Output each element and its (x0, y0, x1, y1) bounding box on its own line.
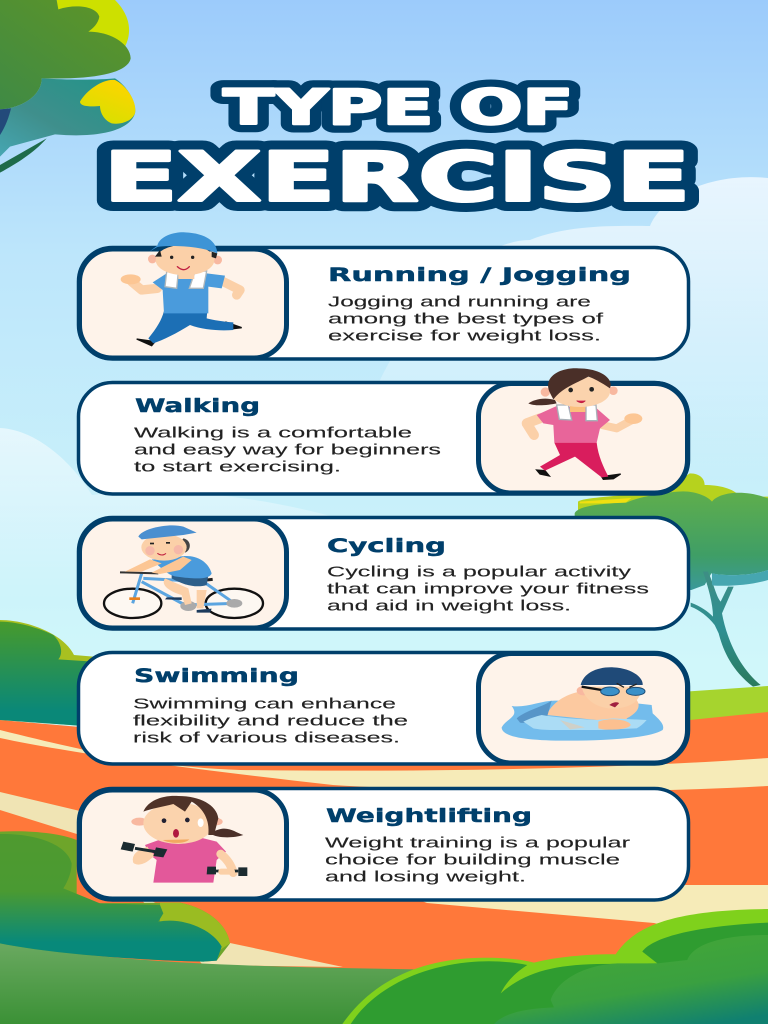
text: cycling description: that can improve your fitness (327, 582, 649, 598)
title line: EXERCISE: EXERCISE (104, 137, 690, 217)
icon: woman lifting dumbbells (121, 796, 247, 883)
text: swimming description (133, 696, 408, 746)
title line: EXERCISE: EXERCISE (104, 137, 690, 217)
text: swimming description: risk of various diseases. (133, 730, 400, 746)
ground (0, 943, 768, 1024)
text: running description (328, 294, 605, 344)
text: running description: Jogging and running are (328, 294, 591, 310)
text: weightlifting description: Weight training is a popular (325, 836, 630, 852)
grass strip right (680, 686, 768, 725)
text: walking description (134, 426, 441, 476)
text: weightlifting description: and losing weight. (325, 870, 526, 886)
heading: cycling: Cycling (327, 535, 446, 557)
text: walking description: to start exercising. (134, 460, 341, 476)
heading: walking: Walking (135, 395, 260, 417)
text: walking description: Walking is a comfortable (134, 426, 412, 442)
bush: left upper (0, 620, 93, 727)
panel: walking (78, 368, 688, 494)
text: running description: among the best types of (328, 312, 605, 328)
text: cycling description: Cycling is a popular activity (327, 564, 632, 580)
panel: weightlifting (78, 788, 688, 900)
running track (0, 712, 768, 970)
text: cycling description: and aid in weight loss. (327, 598, 571, 614)
text: cycling description (327, 564, 649, 614)
heading: running: Running / Jogging (328, 264, 631, 286)
text: swimming description: flexibility and reduce the (133, 714, 408, 730)
text: walking description: and easy way for beginners (134, 442, 441, 458)
clouds (0, 177, 768, 600)
heading: swimming: Swimming (134, 665, 299, 687)
icon: swimmer (502, 667, 663, 741)
icon: walking woman (527, 368, 642, 479)
text: swimming description: Swimming can enhance (133, 696, 396, 712)
title line: TYPE OF: TYPE OF (223, 80, 573, 136)
panel: running / jogging (78, 232, 688, 359)
heading: weightlifting: Weightlifting (326, 805, 532, 827)
text: weightlifting description: choice for building muscle (325, 852, 620, 868)
icon: jogging man (121, 232, 242, 346)
title (104, 80, 690, 217)
icon: cyclist (104, 525, 263, 618)
bush: right lower (342, 909, 768, 1024)
panel: cycling (78, 518, 688, 629)
text: running description: exercise for weight loss. (328, 328, 601, 344)
tree: right (575, 473, 768, 687)
panel: swimming (78, 652, 688, 764)
tree: top left (0, 0, 135, 173)
title line: TYPE OF: TYPE OF (223, 80, 573, 136)
text: weightlifting description (325, 836, 630, 886)
bush: left lower (0, 831, 230, 962)
